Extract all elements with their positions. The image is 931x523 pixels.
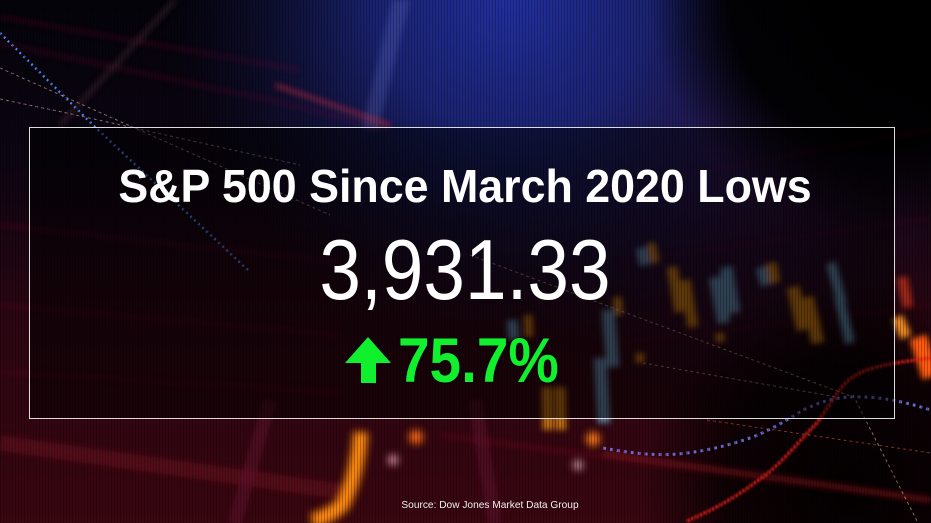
- candlesticks: [512, 243, 931, 430]
- source note: Source: Dow Jones Market Data Group: [401, 499, 579, 511]
- red dotted curve: [687, 358, 931, 521]
- framed panel: [29, 127, 895, 419]
- title: S&P 500 Since March 2020 Lows: [118, 160, 812, 212]
- percent change: 75.7%: [398, 326, 559, 396]
- purple dotted curve: [603, 397, 931, 455]
- orange glow trail and dots: [312, 430, 600, 521]
- blue dotted line: [0, 33, 250, 272]
- blue light beam: [362, 0, 410, 130]
- index value: 3,931.33: [319, 223, 611, 318]
